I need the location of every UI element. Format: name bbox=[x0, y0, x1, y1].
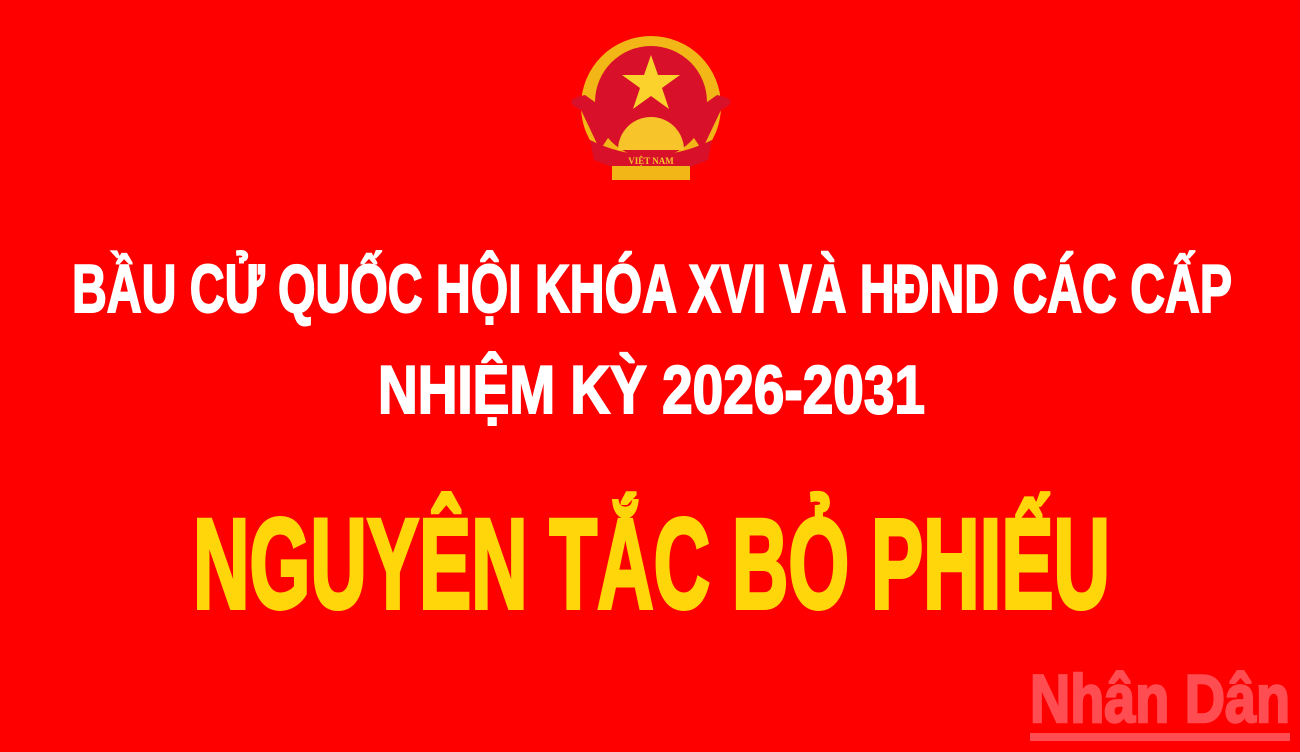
heading line 2: NHIỆM KỲ 2026-2031 bbox=[378, 351, 925, 428]
icon: national emblem: VIỆT NAM bbox=[628, 156, 674, 166]
icon: national emblem bbox=[571, 36, 731, 180]
